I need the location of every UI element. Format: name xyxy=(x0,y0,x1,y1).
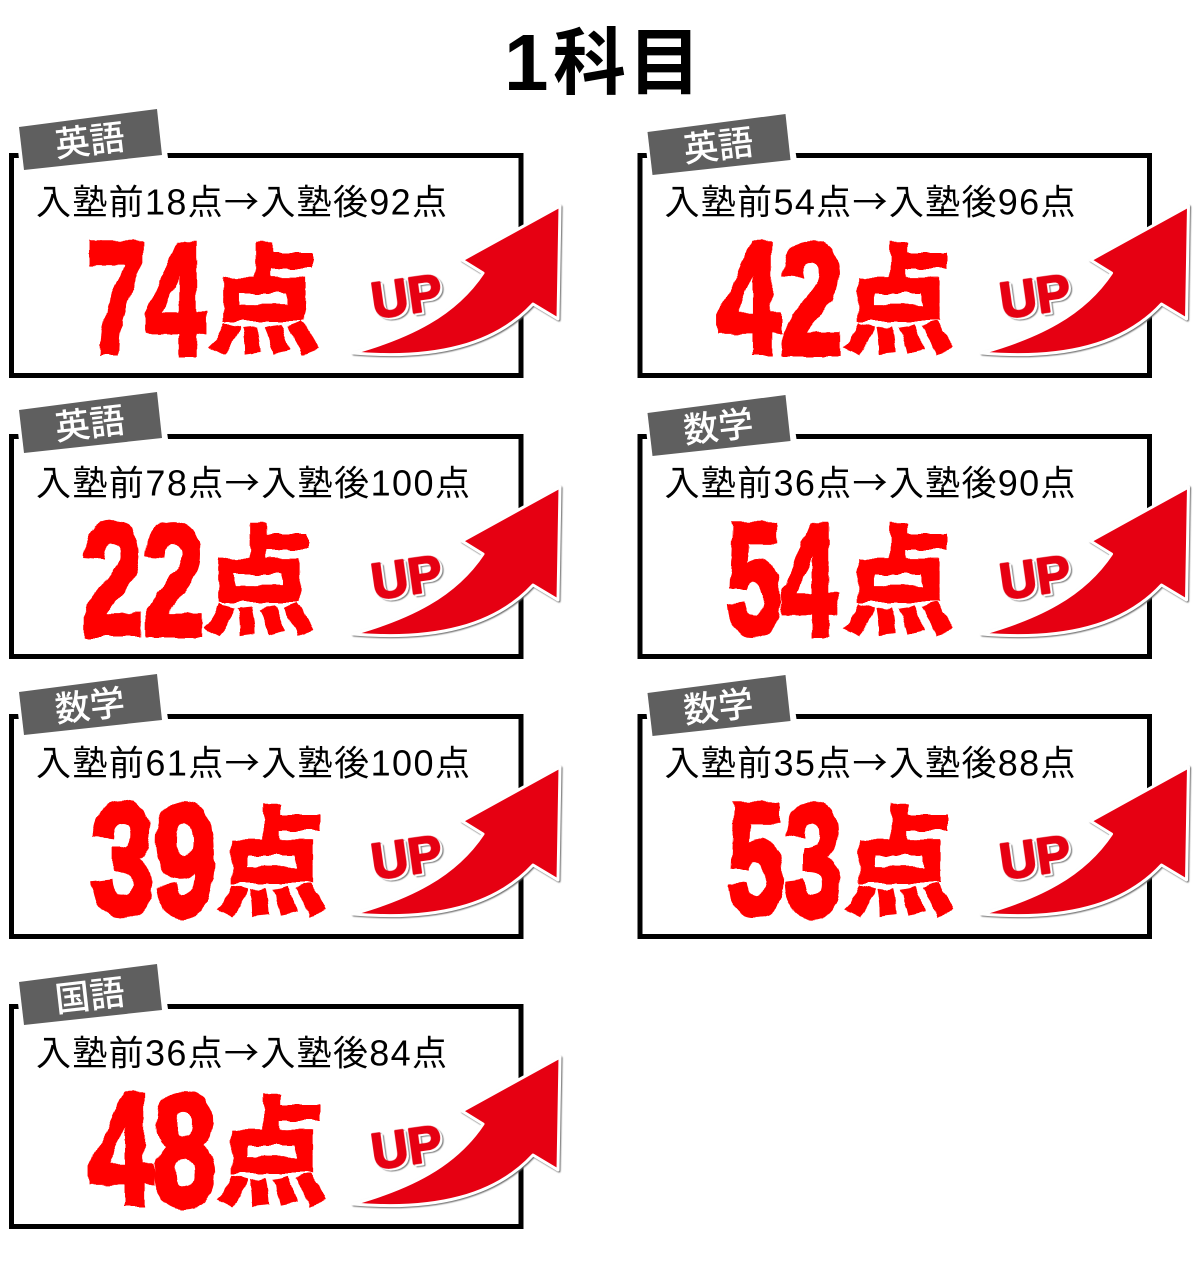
arrow xyxy=(982,487,1188,636)
increase: 48点: 48 xyxy=(90,1062,216,1238)
UP label: UP xyxy=(368,263,446,329)
title: 1 xyxy=(504,18,548,107)
frame xyxy=(12,716,521,936)
increase: 74点: 74 xyxy=(87,211,205,387)
increase: 54点: 54 xyxy=(726,492,837,668)
score change text: 入塾前78点→入塾後100点 xyxy=(36,456,470,506)
increase: 74点: 点 xyxy=(208,209,320,377)
tag: 数学: 数学 xyxy=(680,395,756,454)
tag: 英語 xyxy=(644,108,796,178)
panel: 英語 42点 xyxy=(640,108,1188,387)
increase: 22点: 点 xyxy=(203,490,315,658)
panel: 数学 54点 xyxy=(640,389,1188,668)
increase: 53点: 点 xyxy=(844,771,956,939)
increase: 54点: 点 xyxy=(842,490,954,658)
tag: 国語 xyxy=(15,958,168,1029)
tag: 数学: 数学 xyxy=(680,675,756,734)
UP label: UP xyxy=(368,824,446,890)
arrow xyxy=(353,1057,560,1206)
arrow xyxy=(353,767,560,916)
panel: 国語 48点 xyxy=(12,958,560,1238)
increase: 22点: 22 xyxy=(82,492,204,668)
score change text: 入塾前35点→入塾後88点 xyxy=(664,736,1076,786)
panel: 英語 22点 xyxy=(12,386,560,668)
UP label: UP xyxy=(996,824,1074,890)
tag: 数学: 数学 xyxy=(52,674,127,733)
arrow xyxy=(353,487,560,636)
increase: 48点: 点 xyxy=(216,1061,328,1229)
tag: 数学 xyxy=(644,669,796,739)
tag: 数学 xyxy=(644,389,796,459)
tag: 英語: 英語 xyxy=(680,114,756,173)
frame xyxy=(640,156,1150,376)
frame xyxy=(12,436,521,656)
frame xyxy=(640,716,1150,936)
tag: 数学 xyxy=(15,668,168,739)
frame xyxy=(12,156,521,376)
UP label: UP xyxy=(996,544,1074,610)
increase: 39点: 39 xyxy=(92,772,216,948)
arrow xyxy=(353,206,560,355)
tag: 英語 xyxy=(15,103,168,178)
increase: 53点: 53 xyxy=(728,772,842,948)
UP label: UP xyxy=(368,1114,446,1180)
score change text: 入塾前54点→入塾後96点 xyxy=(664,174,1076,226)
increase: 42点: 点 xyxy=(842,209,954,377)
increase: 42点: 42 xyxy=(718,211,842,387)
UP label: UP xyxy=(368,544,446,610)
score change text: 入塾前36点→入塾後90点 xyxy=(664,456,1076,506)
frame xyxy=(12,1006,521,1226)
arrow xyxy=(982,767,1188,916)
tag: 英語: 英語 xyxy=(52,109,127,168)
panel: 数学 39点 xyxy=(12,668,560,948)
tag: 英語 xyxy=(15,386,168,459)
title: 科目 xyxy=(553,4,703,110)
panel: 英語 74点 xyxy=(12,103,560,387)
UP label: UP xyxy=(996,263,1074,329)
score change text: 入塾前36点→入塾後84点 xyxy=(36,1026,447,1076)
tag: 英語: 英語 xyxy=(52,392,127,451)
score change text: 入塾前18点→入塾後92点 xyxy=(36,174,447,226)
panel: 数学 53点 xyxy=(640,669,1188,948)
arrow xyxy=(982,206,1188,355)
tag: 国語: 国語 xyxy=(52,964,127,1023)
score change text: 入塾前61点→入塾後100点 xyxy=(36,736,470,786)
frame xyxy=(640,436,1150,656)
increase: 39点: 点 xyxy=(216,771,328,939)
